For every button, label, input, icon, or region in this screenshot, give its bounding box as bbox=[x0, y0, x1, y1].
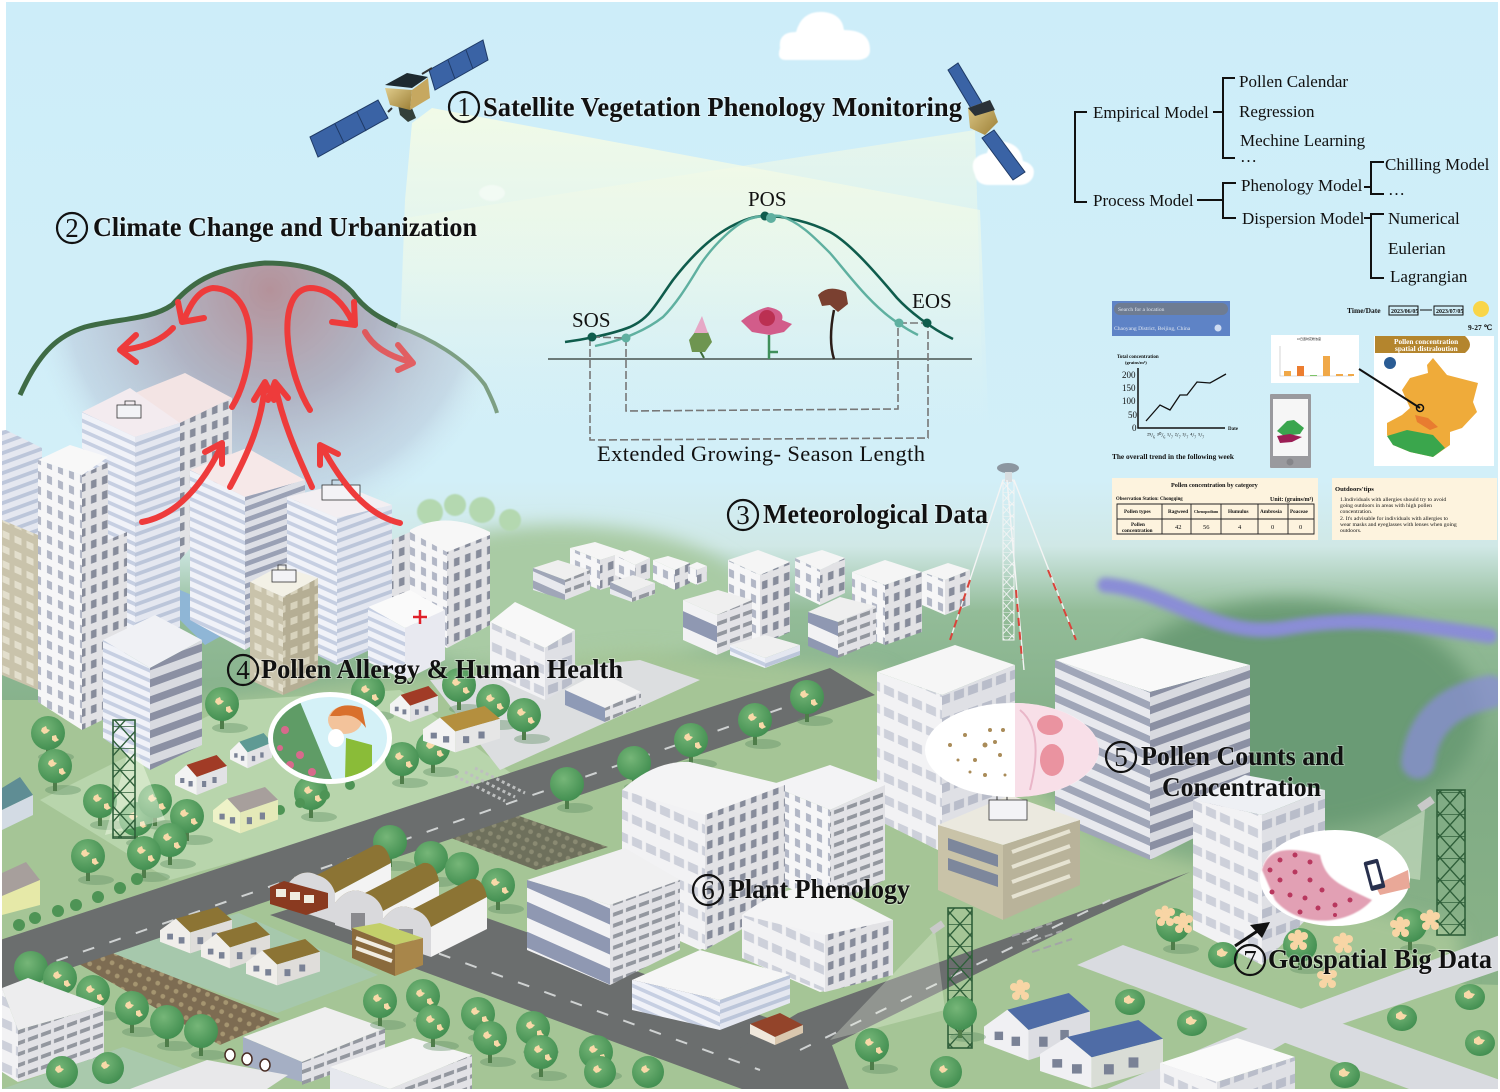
roads bbox=[0, 668, 1500, 1092]
panel: satellite phenology curve: POS bbox=[748, 187, 787, 211]
satellite: right bbox=[948, 63, 1025, 180]
ground and city blocks bbox=[0, 590, 1500, 1092]
line chart: total concentration: Date bbox=[1228, 427, 1239, 432]
spatial distribution map: Pollen concentration bbox=[1394, 337, 1458, 346]
heat island dome bbox=[20, 263, 497, 560]
pollen category table bbox=[1112, 478, 1318, 540]
line chart: total concentration: 0 bbox=[1132, 423, 1137, 433]
title 5: pollen counts: 5 bbox=[1114, 742, 1128, 772]
bar chart thumbnail: 10日逐时花粉浓度 bbox=[1297, 336, 1321, 341]
pollen category table: Pollen types bbox=[1124, 509, 1151, 515]
title 7: geospatial big data: 7 bbox=[1243, 945, 1257, 975]
surveillance and meteorological towers bbox=[105, 463, 1465, 1048]
panel: forecasting model tree bbox=[1075, 72, 1490, 286]
pollen category table: 56 bbox=[1203, 524, 1210, 531]
title 3: meteorological data: Meteorological Data bbox=[763, 499, 988, 529]
far building clusters bbox=[533, 542, 970, 668]
callout: person sneezing bubble bbox=[268, 692, 392, 784]
outdoors tips box: 2. It's advisable for individuals with allergies to bbox=[1340, 515, 1448, 522]
title 6: plant phenology: 6 bbox=[701, 875, 715, 905]
title 5: pollen counts bbox=[1106, 741, 1344, 802]
pollen category table: Unit: (grains/m³) bbox=[1270, 496, 1313, 503]
date and temperature: Time/Date bbox=[1347, 306, 1381, 315]
date and temperature: 2023/07/05 bbox=[1436, 309, 1463, 315]
title 7: geospatial big data: Geospatial Big Data bbox=[1268, 944, 1492, 974]
central and right buildings bbox=[2, 638, 1325, 1089]
phone map bbox=[1270, 394, 1311, 468]
date and temperature: 2023/06/05 bbox=[1391, 309, 1418, 315]
location search widget: Search for a location bbox=[1118, 306, 1165, 313]
pollen category table: 42 bbox=[1175, 524, 1182, 531]
line chart: total concentration: ²⁹/₆ ³⁰/₆ ¹/₇ ²/₇ ³/₇ ⁴/₇ ⁵/₇ bbox=[1147, 431, 1204, 439]
panel: forecasting model tree: Chilling Model bbox=[1385, 155, 1490, 174]
title 5: pollen counts: Pollen Counts and bbox=[1141, 741, 1344, 771]
location search widget bbox=[1112, 301, 1230, 336]
title 2: climate change: 2 bbox=[65, 213, 79, 243]
icon: blooming rose bbox=[741, 307, 792, 359]
pollen category table: Poaceae bbox=[1290, 509, 1309, 515]
pollen category table: Pollen bbox=[1131, 522, 1145, 528]
line chart: total concentration bbox=[1112, 355, 1239, 461]
date and temperature: 9-27 ℃ bbox=[1468, 323, 1493, 332]
outdoors tips box: going outdoors in areas with high pollen bbox=[1340, 503, 1432, 509]
panel: satellite phenology curve: SOS bbox=[572, 308, 611, 332]
arrow: geospatial data to bubble bbox=[1235, 922, 1270, 946]
climate heat flow arrows bbox=[120, 288, 413, 523]
tower: right camera mast bbox=[1330, 790, 1465, 935]
pollen category table: 0 bbox=[1271, 524, 1274, 531]
outdoors tips box: Outdoors'tips bbox=[1335, 486, 1374, 493]
title 4: pollen allergy: Pollen Allergy & Human Health bbox=[261, 654, 623, 684]
line chart: total concentration: 200 bbox=[1122, 370, 1136, 380]
outdoors tips box: wear masks and eyeglasses with lenses when going bbox=[1340, 522, 1457, 528]
title 4: pollen allergy: 4 bbox=[236, 655, 250, 685]
panel: forecasting model tree: … bbox=[1388, 180, 1405, 199]
icon: rooftop jars bbox=[225, 1049, 270, 1071]
pollen category table: Pollen concentration by category bbox=[1171, 482, 1259, 489]
line chart: total concentration: 150 bbox=[1122, 383, 1136, 393]
panel: satellite phenology curve bbox=[548, 187, 972, 466]
pollen category table: Ragweed bbox=[1168, 509, 1188, 515]
panel: satellite phenology curve: EOS bbox=[912, 289, 952, 313]
tower: centre camera mast bbox=[830, 908, 972, 1048]
callout: blossom and phone bubble bbox=[1260, 830, 1410, 926]
left high-rise district bbox=[2, 373, 641, 770]
panel: forecasting model tree: Empirical Model bbox=[1093, 103, 1209, 122]
icon: hospital cross bbox=[413, 610, 427, 624]
panel: forecasting model tree: Pollen Calendar bbox=[1239, 72, 1348, 91]
pollen category table: 0 bbox=[1299, 524, 1302, 531]
panel: forecasting model tree: … bbox=[1240, 147, 1257, 166]
pollen category table: 4 bbox=[1238, 524, 1242, 531]
panel: satellite phenology curve: Extended Growing- Season Length bbox=[597, 441, 925, 466]
outdoors tips box: 1.Individuals with allergies should try to avoid bbox=[1340, 497, 1446, 503]
line chart: total concentration: The overall trend in the following week bbox=[1112, 452, 1235, 461]
farm barns and sheds bbox=[160, 845, 487, 985]
houses bbox=[2, 686, 500, 915]
date and temperature bbox=[1347, 301, 1493, 332]
icon: olive rooftop pollen sampler bbox=[989, 792, 1027, 820]
monitoring instruments on roofs bbox=[117, 401, 360, 582]
pollen category table: concentration bbox=[1122, 528, 1153, 534]
title 3: meteorological data: 3 bbox=[736, 500, 750, 530]
panel: forecasting model tree: Phenology Model bbox=[1241, 176, 1363, 195]
bar chart thumbnail bbox=[1271, 335, 1359, 383]
tower: left camera mast bbox=[105, 720, 165, 838]
pollen category table: Ambrosia bbox=[1260, 509, 1282, 515]
callout: pollen microscope bubble bbox=[925, 703, 1099, 797]
panel: forecasting model tree: Mechine Learning bbox=[1240, 131, 1366, 150]
trees and bushes bbox=[13, 668, 833, 1060]
location search widget: Chaoyang District, Beijing, China bbox=[1114, 326, 1191, 332]
panel: forecasting model tree: Numerical bbox=[1388, 209, 1460, 228]
foreground trees and blossoms bbox=[46, 906, 1495, 1088]
line chart: total concentration: (grains/m³) bbox=[1125, 360, 1147, 365]
line chart: total concentration: 50 bbox=[1128, 410, 1138, 420]
distant green land bbox=[370, 494, 1480, 830]
line chart: total concentration: Total concentration bbox=[1117, 355, 1159, 360]
panel: forecasting model tree: Process Model bbox=[1093, 191, 1194, 210]
tower: meteorological mast with guy wires bbox=[950, 463, 1076, 670]
outdoors tips box: outdoors. bbox=[1340, 528, 1362, 534]
panel: forecasting model tree: Eulerian bbox=[1388, 239, 1446, 258]
panel: pollen dashboard bbox=[1112, 301, 1497, 540]
title 1: satellite monitoring: Satellite Vegetation Phenology Monitoring bbox=[483, 92, 962, 122]
pollen category table: Humulus bbox=[1228, 509, 1248, 515]
outdoors tips box bbox=[1332, 478, 1497, 540]
panel: forecasting model tree: Dispersion Model bbox=[1242, 209, 1365, 228]
spatial distribution map: spatial distraloution bbox=[1395, 344, 1458, 353]
outdoors tips box: concentration. bbox=[1340, 509, 1373, 515]
title 6: plant phenology: Plant Phenology bbox=[729, 874, 910, 904]
pollen category table: Observation Station: Chongqing bbox=[1116, 497, 1183, 502]
panel: forecasting model tree: Lagrangian bbox=[1390, 267, 1468, 286]
icon: flower bud bbox=[689, 316, 712, 358]
pollen category table: Chenopodium bbox=[1194, 509, 1219, 514]
clouds bbox=[479, 12, 1034, 201]
satellite light beams bbox=[395, 108, 990, 460]
river bbox=[1105, 585, 1490, 762]
satellite: left bbox=[310, 40, 488, 157]
title 2: climate change: Climate Change and Urbanization bbox=[93, 212, 477, 242]
title 1: satellite monitoring: 1 bbox=[457, 92, 471, 122]
vehicles bbox=[270, 881, 803, 1045]
panel: forecasting model tree: Regression bbox=[1239, 102, 1315, 121]
line chart: total concentration: 100 bbox=[1122, 396, 1136, 406]
icon: wilted flower bbox=[818, 289, 848, 359]
spatial distribution map bbox=[1359, 336, 1494, 466]
title 5: pollen counts: Concentration bbox=[1162, 772, 1321, 802]
